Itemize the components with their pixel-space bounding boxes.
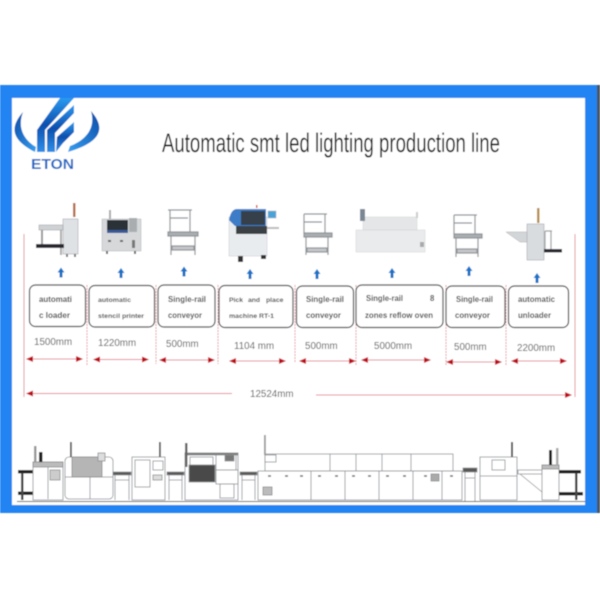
machine: pick and place <box>229 205 279 262</box>
machine: conveyor 2 <box>304 214 332 255</box>
label text: and <box>248 297 260 304</box>
machine: stencil printer <box>102 210 141 254</box>
label text: c loader <box>39 311 70 320</box>
drawing: AOI <box>132 442 165 500</box>
machine: reflow oven <box>356 209 425 252</box>
label text: place <box>266 297 284 304</box>
ground line <box>17 500 585 502</box>
drawing: conveyor A <box>113 472 131 500</box>
label text: automatic <box>98 297 131 304</box>
blue arrows <box>58 266 540 283</box>
dimension values: 1220mm <box>98 338 136 349</box>
label text: automatic <box>518 295 556 304</box>
dimension values: 500mm <box>166 339 199 350</box>
drawing: loader <box>18 446 63 500</box>
machine: conveyor 3 <box>454 215 482 257</box>
label text: machine RT-1 <box>229 313 274 320</box>
drawing: reflow oven <box>258 435 462 500</box>
dimension values: 12524mm <box>250 389 294 400</box>
label text: 8 <box>430 294 435 303</box>
drawing: placement machine <box>185 443 238 500</box>
label text <box>39 294 556 320</box>
machine: conveyor 1 <box>168 210 198 255</box>
label boxes <box>30 285 568 328</box>
logo: ETON: ETON <box>31 157 74 173</box>
dimension guide lines <box>24 234 575 397</box>
machine: automatic unloader <box>506 208 562 260</box>
dimension values: 1500mm <box>34 337 72 348</box>
label text: stencil printer <box>98 313 145 320</box>
drawing: conveyor D <box>463 468 477 501</box>
machine: automatic loader <box>36 203 78 257</box>
label text: Single-rail <box>168 295 206 304</box>
drawing: printer <box>65 442 113 499</box>
infographic <box>0 85 600 513</box>
blue frame <box>0 85 600 513</box>
production line elevation drawing <box>17 435 585 502</box>
dimension values: 500mm <box>454 342 487 353</box>
label text: Single-rail <box>456 295 493 304</box>
label text: Single-rail <box>366 294 403 303</box>
drawing: inspection unit <box>480 442 517 500</box>
logo: ETON <box>15 98 99 173</box>
label text: Single-rail <box>306 295 344 304</box>
dimension arrows <box>27 359 571 395</box>
dimension values <box>34 337 555 400</box>
label text: conveyor <box>168 311 202 320</box>
label text: zones reflow oven <box>365 311 433 320</box>
dimension values: 1104 mm <box>234 341 274 352</box>
drawing: unloader <box>518 448 583 500</box>
dimension values: 5000mm <box>374 341 412 352</box>
label text: unloader <box>518 311 551 320</box>
dimension values: 500mm <box>305 341 338 352</box>
drawing: conveyor C <box>240 472 257 500</box>
machine photo row <box>36 203 562 262</box>
drawing: conveyor B <box>167 472 184 500</box>
label text: Pick <box>229 297 243 304</box>
label text: automati <box>39 295 72 304</box>
label text: conveyor <box>306 311 341 320</box>
dimension values: 2200mm <box>517 343 555 354</box>
label text: conveyor <box>455 311 490 320</box>
